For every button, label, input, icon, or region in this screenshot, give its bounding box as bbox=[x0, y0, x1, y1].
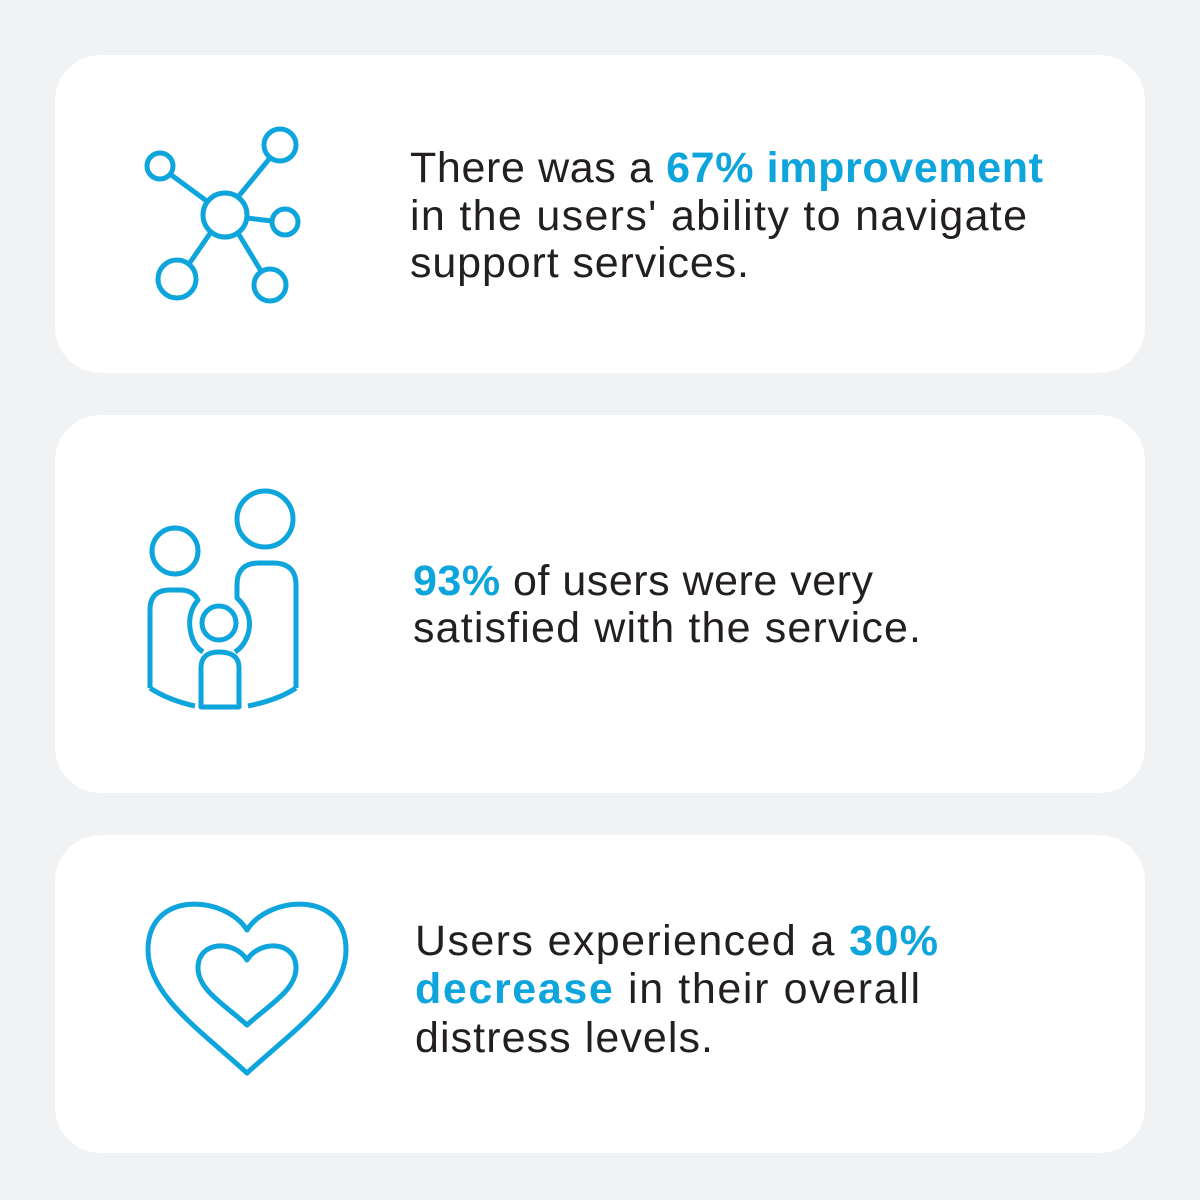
text: navigation stat: support services. bbox=[410, 239, 749, 287]
panel: distress bbox=[55, 835, 1145, 1153]
text: distress stat: Users experienced a 30% bbox=[415, 917, 938, 965]
text: distress stat bbox=[415, 917, 938, 1062]
text: satisfaction stat: 93% of users were very bbox=[413, 557, 874, 605]
icon: family bbox=[150, 491, 296, 707]
panel: navigation bbox=[55, 55, 1145, 373]
text: satisfaction stat: satisfied with the service. bbox=[413, 604, 921, 652]
icon: heart bbox=[148, 904, 346, 1073]
text: satisfaction stat bbox=[413, 557, 921, 652]
panel: satisfaction bbox=[55, 415, 1145, 793]
text: navigation stat bbox=[410, 144, 1043, 287]
text: navigation stat: in the users' ability to navigate bbox=[410, 192, 1027, 240]
text: distress stat: decrease in their overall bbox=[415, 965, 920, 1013]
icon: network bbox=[147, 129, 298, 301]
text: distress stat: distress levels. bbox=[415, 1014, 713, 1062]
text: navigation stat: There was a 67% improvement bbox=[410, 144, 1043, 192]
